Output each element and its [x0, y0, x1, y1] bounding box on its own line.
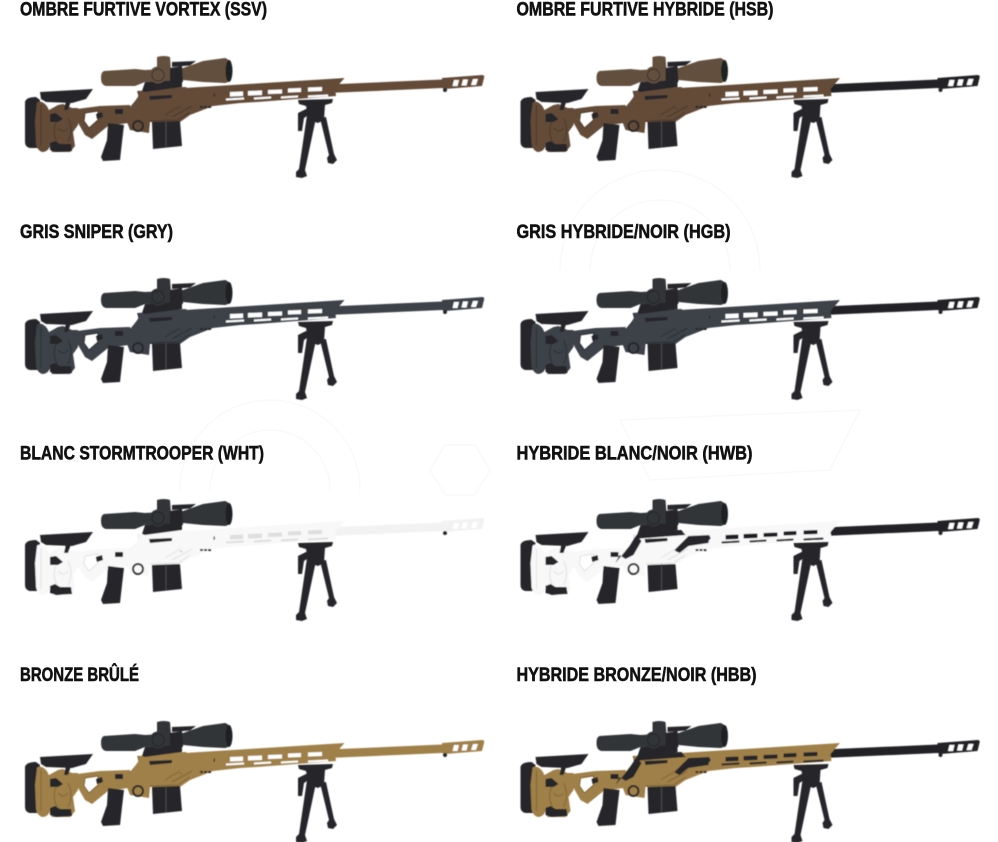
- rifle: white: [25, 499, 484, 621]
- panel: Ombre Furtive Vortex: [20, 0, 484, 178]
- panel: Gris Sniper: [20, 222, 484, 400]
- rifle: bronze: [25, 721, 484, 842]
- rifle: bronze and black: [520, 721, 980, 842]
- panel: Ombre Furtive Hybride: [516, 0, 980, 178]
- rifle: grey and black: [520, 278, 980, 400]
- heading: Hybride Bronze/Noir: HYBRIDE BRONZE/NOIR (HBB): [516, 665, 756, 686]
- heading: Hybride Blanc/Noir: HYBRIDE BLANC/NOIR (HWB): [516, 444, 752, 464]
- rifle: white and black: [520, 499, 980, 621]
- panel: Gris Hybride/Noir: [516, 222, 980, 400]
- panel: Hybride Bronze/Noir: [516, 665, 980, 842]
- panel: Blanc Stormtrooper: [20, 444, 484, 621]
- panel: Bronze Brûlé: [20, 664, 484, 842]
- heading: Gris Sniper: GRIS SNIPER (GRY): [20, 222, 173, 243]
- rifle: grey: [25, 278, 484, 400]
- heading: Bronze Brûlé: BRONZE BRÛLÉ: [20, 664, 139, 686]
- heading: Gris Hybride/Noir: GRIS HYBRIDE/NOIR (HGB): [516, 222, 730, 243]
- heading: Ombre Furtive Hybride: OMBRE FURTIVE HYBRIDE (HSB): [516, 0, 774, 20]
- background watermark: [180, 170, 860, 495]
- panel: Hybride Blanc/Noir: [516, 444, 980, 621]
- heading: Ombre Furtive Vortex: OMBRE FURTIVE VORTEX (SSV): [20, 0, 267, 20]
- rifle: brown and black: [520, 56, 980, 178]
- heading: Blanc Stormtrooper: BLANC STORMTROOPER (WHT): [20, 444, 264, 464]
- rifle: brown: [25, 56, 484, 178]
